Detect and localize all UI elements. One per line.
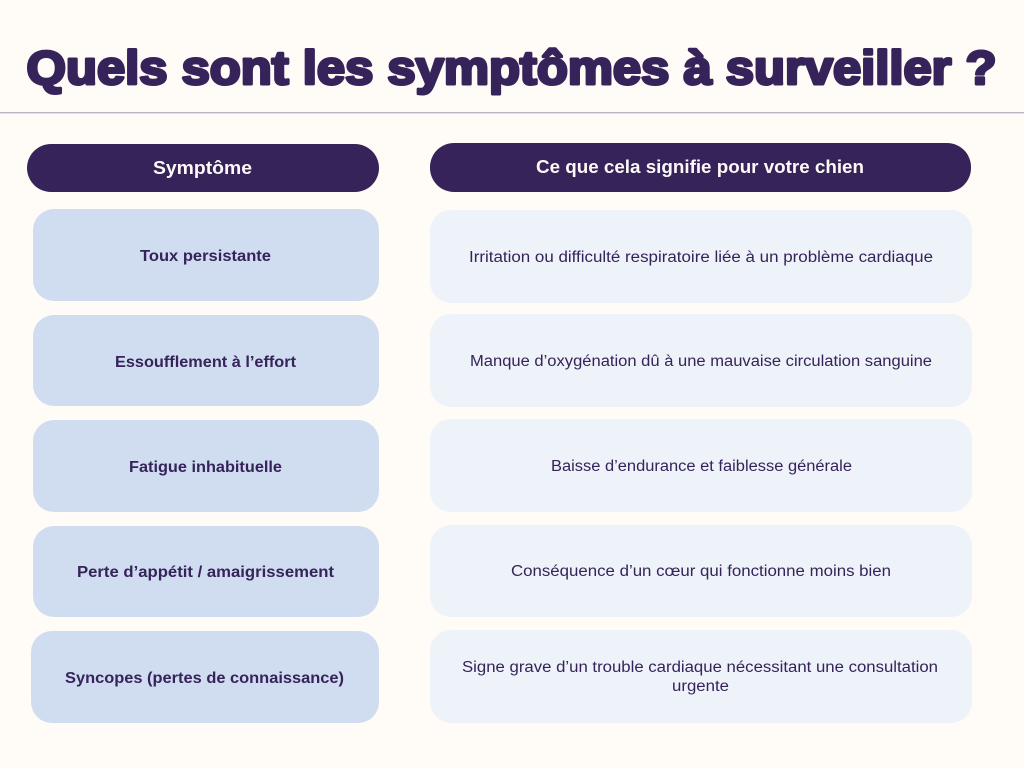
column header: signification: Ce que cela signifie pour votre chien	[536, 157, 864, 177]
row 4 meaning: Conséquence d’un cœur qui fonctionne moins bien	[511, 563, 891, 580]
row 3 symptom: Fatigue inhabituelle	[129, 459, 282, 476]
row 1 symptom	[33, 209, 379, 301]
row 4 symptom: Perte d’appétit / amaigrissement	[77, 564, 334, 581]
row 1 meaning	[430, 210, 972, 303]
column header: symptôme	[27, 144, 379, 192]
row 5 meaning: Signe grave d’un trouble cardiaque nécessitant une consultation	[462, 659, 938, 676]
row 5 symptom	[31, 631, 379, 723]
row 1 symptom: Toux persistante	[140, 248, 271, 265]
row 3 symptom	[33, 420, 379, 512]
row 5 symptom: Syncopes (pertes de connaissance)	[65, 670, 344, 687]
column header: signification	[430, 143, 971, 192]
row 5 meaning	[430, 630, 972, 723]
row 2 symptom: Essoufflement à l’effort	[115, 354, 296, 371]
column header: symptôme: Symptôme	[153, 158, 252, 178]
row 5 meaning: urgente	[672, 678, 729, 695]
row 3 meaning	[430, 419, 972, 512]
row 3 meaning: Baisse d’endurance et faiblesse générale	[551, 458, 852, 475]
row 4 meaning	[430, 525, 972, 617]
row 2 meaning: Manque d’oxygénation dû à une mauvaise circulation sanguine	[470, 353, 932, 370]
row 2 meaning	[430, 314, 972, 407]
title: Quels sont les symptômes à surveiller ?	[26, 41, 997, 94]
row 4 symptom	[33, 526, 379, 617]
row 2 symptom	[33, 315, 379, 406]
row 1 meaning: Irritation ou difficulté respiratoire liée à un problème cardiaque	[469, 249, 933, 266]
